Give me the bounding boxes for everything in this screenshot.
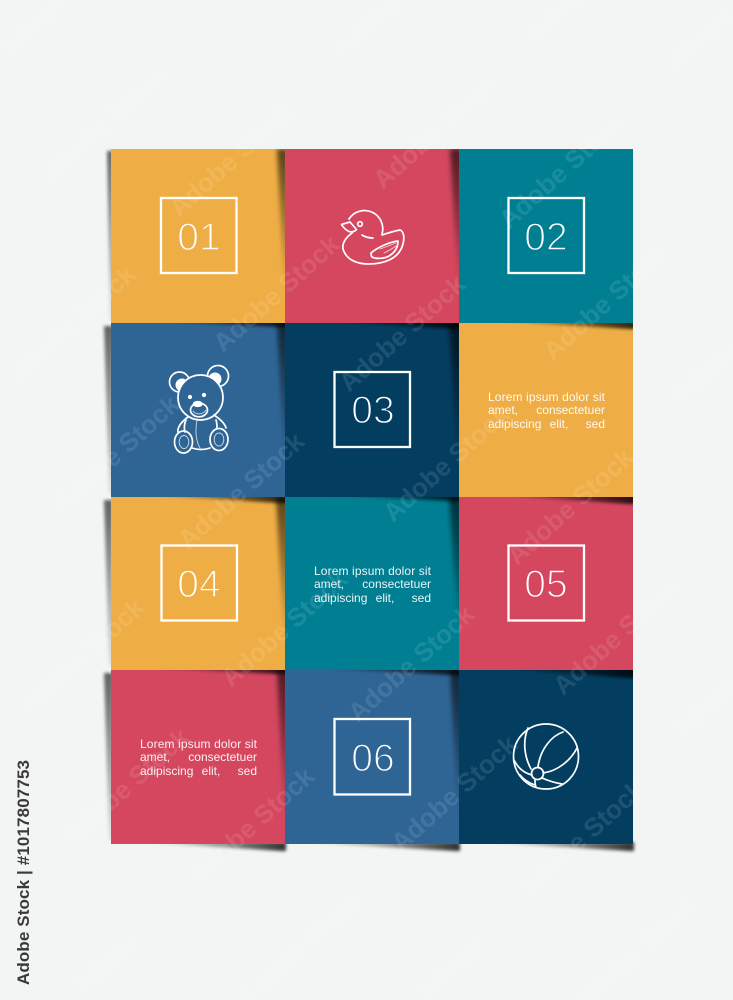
tile: yellow text background [459, 323, 633, 497]
text block: teal tile [314, 564, 432, 605]
number box 04: 04 [177, 563, 221, 606]
watermarks: Adobe Stock [547, 572, 685, 701]
number box 03 [334, 372, 410, 447]
icon: rubber duck [342, 211, 404, 264]
watermarks: Adobe Stock [35, 59, 173, 188]
text block: teal tile: adipiscing [314, 591, 367, 605]
text block: red tile: Lorem ipsum dolor sit [140, 737, 258, 751]
text block: yellow tile: amet, [488, 403, 518, 417]
watermarks: Adobe Stock [163, 94, 301, 223]
number box 01 [161, 198, 236, 273]
watermarks: Adobe Stock [377, 399, 515, 528]
text block: red tile: amet, [140, 750, 170, 764]
tile: red duck background [285, 149, 459, 323]
watermarks: Adobe Stock [342, 599, 480, 728]
text block: red tile [140, 737, 258, 778]
number box 03: 03 [351, 389, 395, 432]
watermarks: Adobe Stock [215, 564, 353, 693]
watermarks: Adobe Stock [172, 426, 310, 555]
text block: yellow tile: adipiscing [488, 417, 541, 431]
watermarks: Adobe Stock [57, 722, 195, 851]
watermarks: Adobe Stock [207, 229, 345, 358]
watermarks: Adobe Stock [12, 592, 150, 721]
tile: teal 02 background [459, 149, 633, 323]
text block: teal tile: consectetuer [362, 577, 431, 591]
text block: yellow tile: Lorem ipsum dolor sit [488, 390, 606, 404]
icon: beach ball [514, 724, 578, 789]
tile grid [111, 149, 633, 844]
text block: red tile: sed [238, 764, 257, 778]
number box 02: 02 [524, 216, 568, 259]
watermarks: Adobe Stock [182, 761, 320, 890]
text block: yellow tile: consectetuer [536, 403, 605, 417]
watermarks: Adobe [66, 925, 146, 1000]
text block: red tile: elit, [202, 764, 220, 778]
text block: yellow tile [488, 390, 606, 431]
text block: teal tile: Lorem ipsum dolor sit [314, 564, 432, 578]
number box 06 [334, 719, 410, 794]
tile: navy ball background [459, 670, 633, 844]
outer drop shadows around the grid [104, 151, 634, 851]
text block: teal tile: amet, [314, 577, 344, 591]
tile: blue 06 background [285, 670, 459, 844]
text block: yellow tile: sed [586, 417, 605, 431]
watermarks: Adobe Stock [333, 269, 471, 398]
text block: red tile: consectetuer [188, 750, 257, 764]
tile: blue bear background [111, 323, 285, 497]
infographic canvas [17, 148, 636, 985]
inner fold shadows on the tiles [130, 149, 636, 815]
number box 02 [508, 198, 584, 273]
watermarks: Adobe Stock [512, 774, 650, 903]
watermarks: Adobe Stock [3, 259, 141, 388]
tile: teal text background [285, 497, 459, 670]
watermarks: Adobe Stock [537, 237, 675, 366]
number box 06: 06 [351, 737, 395, 780]
number box 05 [508, 546, 584, 620]
tile: yellow 04 background [111, 497, 285, 670]
tile: red 05 background [459, 497, 633, 670]
text block: red tile: adipiscing [140, 764, 193, 778]
side label: stock id: Adobe Stock | #1017807753 [14, 760, 33, 985]
text block: teal tile: sed [412, 591, 431, 605]
tile: yellow 01 background [111, 149, 285, 323]
text block: yellow tile: elit, [550, 417, 568, 431]
tile: navy 03 background [285, 323, 459, 497]
number box 04 [162, 546, 237, 620]
watermarks: Adobe Stock [493, 106, 631, 235]
watermarks: Adobe Stock [47, 389, 185, 518]
number box 01: 01 [177, 216, 221, 259]
watermarks: Adobe Stock [367, 66, 505, 195]
watermarks: Adobe Stock [385, 729, 523, 858]
tile: red text background [111, 670, 285, 844]
text block: teal tile: elit, [376, 591, 394, 605]
number box 05: 05 [524, 563, 568, 606]
watermarks: Adobe Stock [501, 442, 639, 571]
icon: teddy bear [170, 366, 228, 453]
